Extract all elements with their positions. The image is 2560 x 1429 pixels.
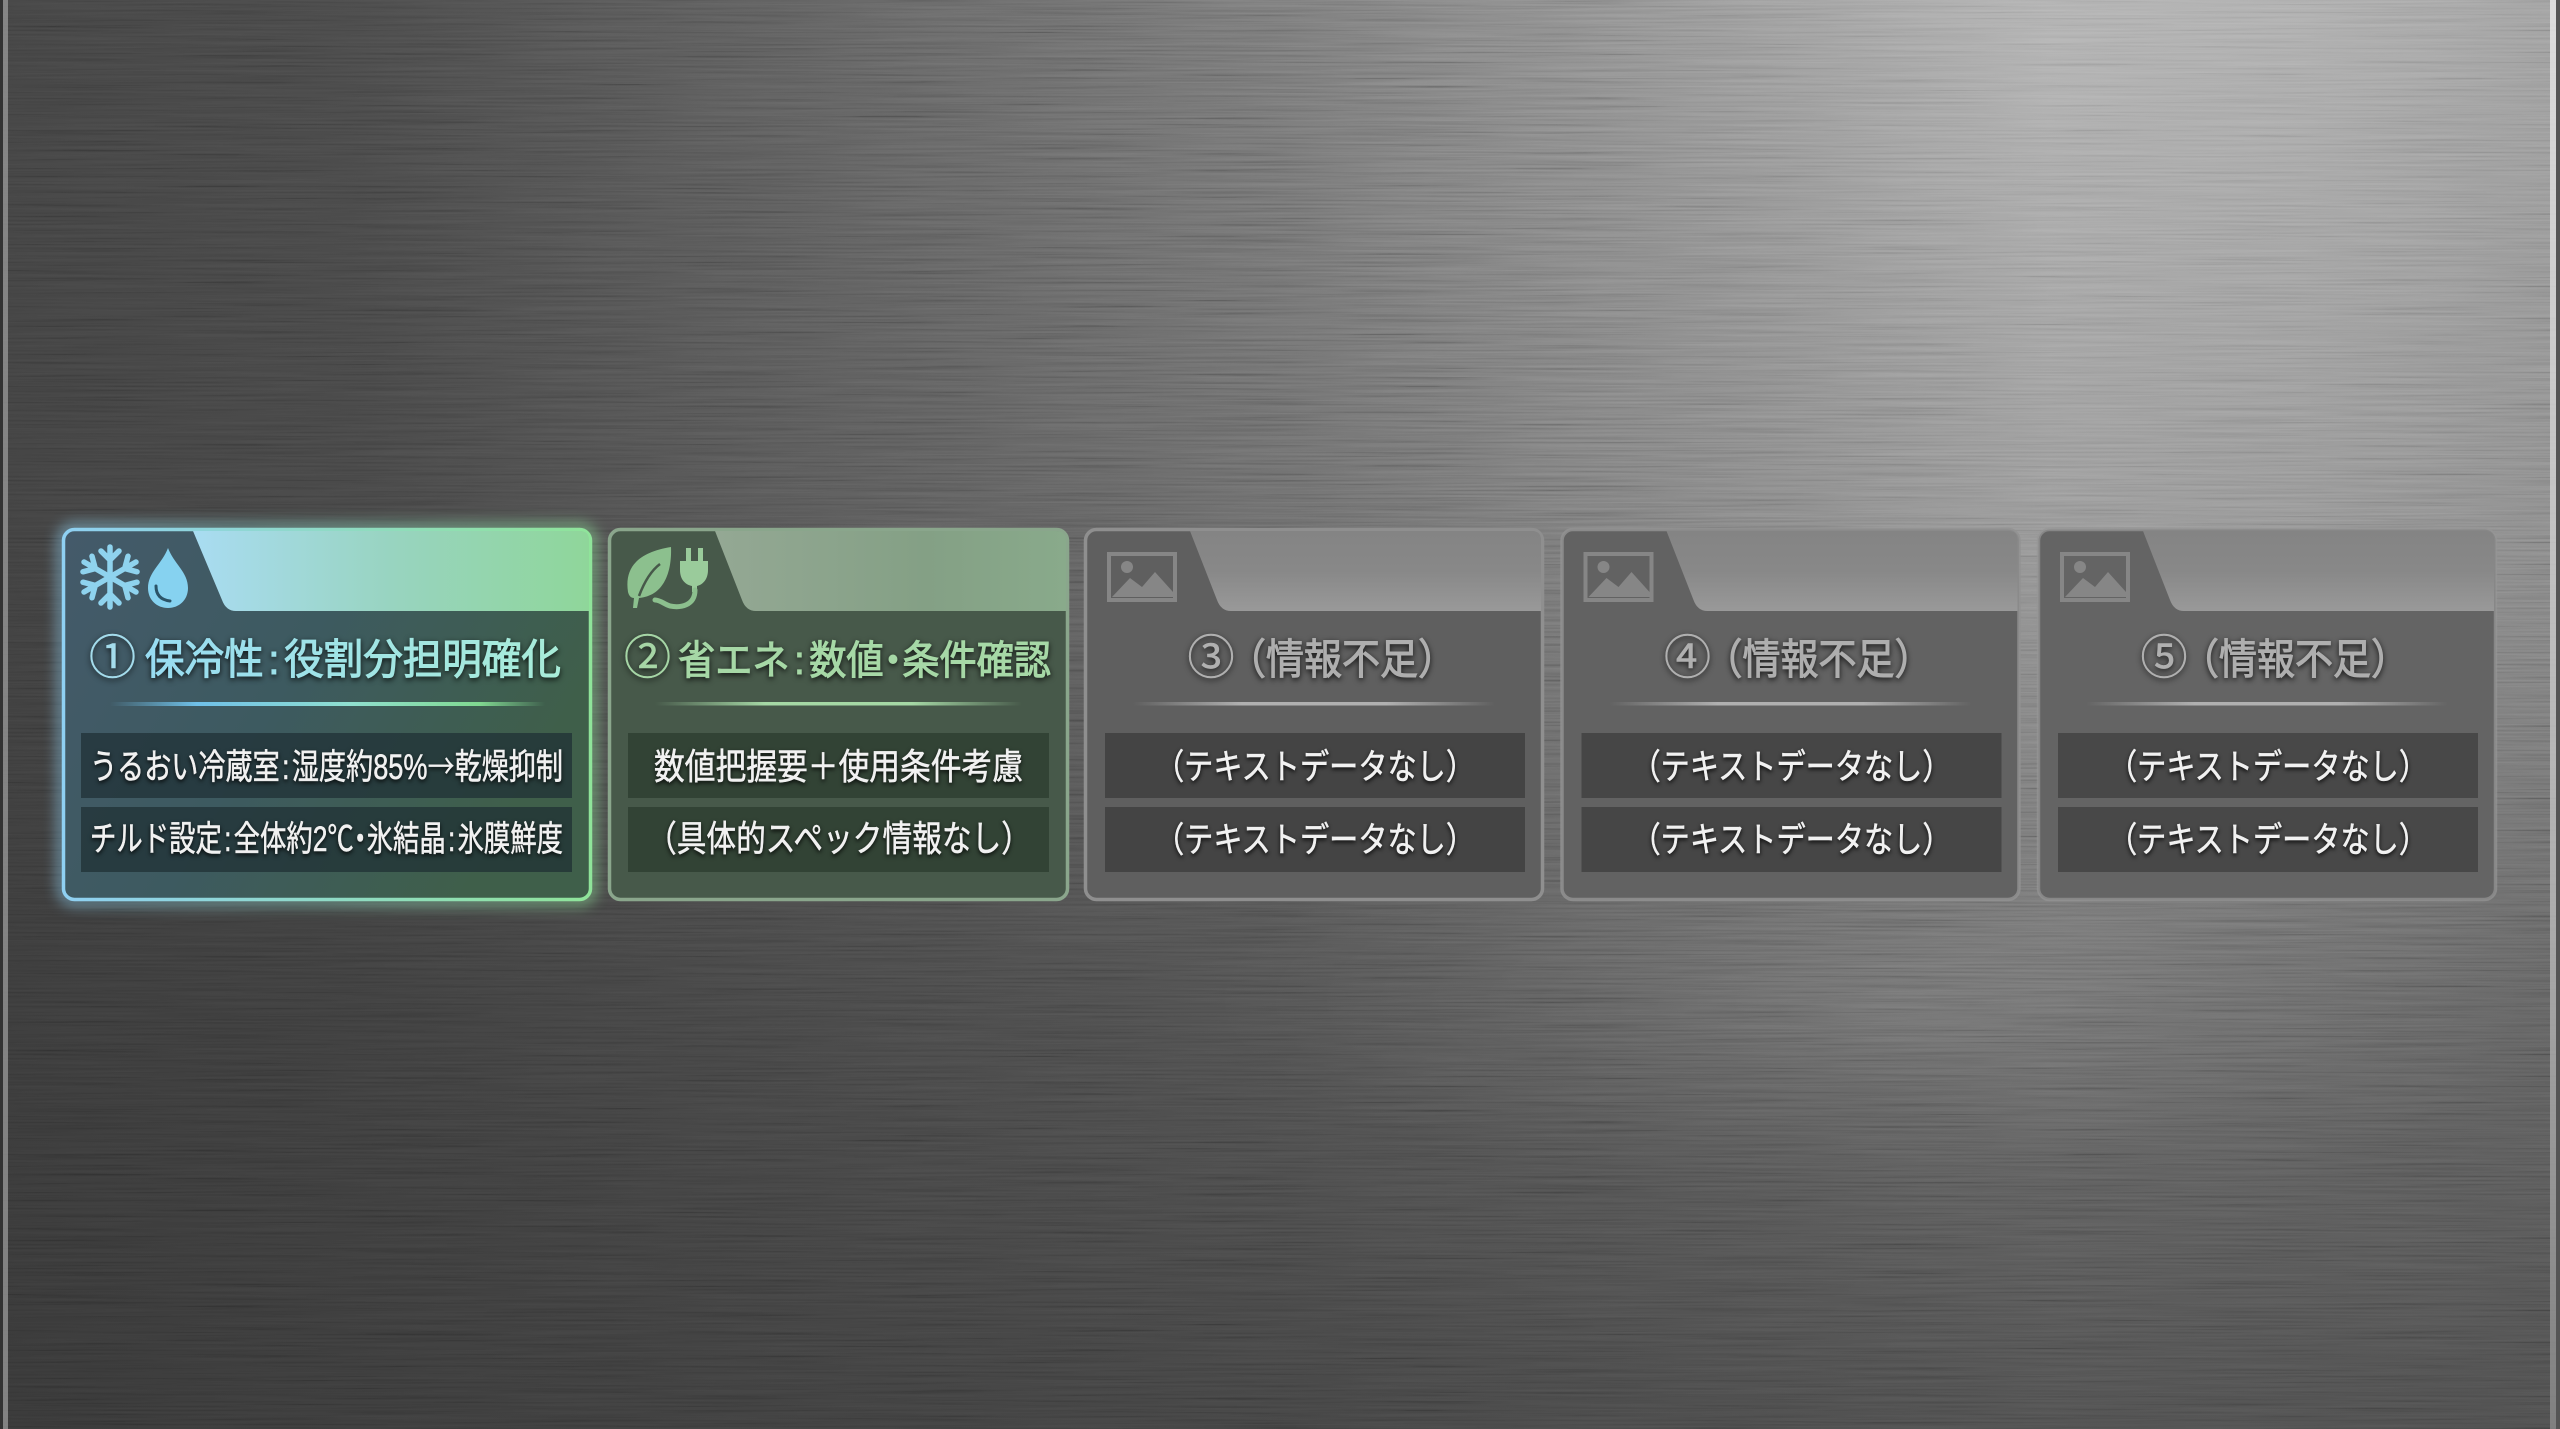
row 1: （テキストデータなし） [1155,748,1475,787]
heading [1664,631,1932,684]
icon: leaf and plug [627,547,708,608]
heading: 保冷性:役割分担明確化 [145,636,561,683]
header tab [1190,531,1541,611]
row 2 [628,807,1049,872]
panel: card 3 [1086,530,1542,900]
row 2 [2058,807,2478,872]
panel: card 1 保冷性 [62,528,592,901]
row 1 [1582,733,2002,798]
row 1 [2058,733,2478,798]
row 2 [81,807,572,872]
panel: card 2 省エネ [610,530,1068,900]
header tab [193,531,589,611]
row 2: （具体的スペック情報なし） [647,818,1031,859]
row 1: （テキストデータなし） [2108,748,2428,787]
heading: ③ [1188,631,1234,684]
row 2: チルド設定:全体約2℃・氷結晶:氷膜鮮度 [90,820,563,859]
icon: image placeholder [1109,554,1175,600]
heading: ② [624,631,671,684]
header tab [1666,531,2018,611]
panel: card 4 [1562,530,2019,900]
row 1: うるおい冷蔵室:湿度約85%→乾燥抑制 [90,739,563,790]
row 2: （テキストデータなし） [1155,821,1475,860]
heading [1188,631,1456,684]
heading [2140,631,2409,684]
panel: card 5 [2038,530,2496,900]
row 1 [628,733,1049,798]
heading: （情報不足） [1704,636,1932,683]
row 1: （テキストデータなし） [1632,748,1952,787]
icon: image placeholder [1586,554,1652,600]
header tab [715,531,1066,611]
icon: water drop [148,548,188,608]
row 2 [1582,807,2002,872]
row 2: （テキストデータなし） [2108,821,2428,860]
heading: ① [89,631,136,684]
icon: image placeholder [2062,554,2128,600]
heading: （情報不足） [1228,636,1456,683]
row 1: 数値把握要＋使用条件考慮 [654,746,1023,787]
row 1 [1105,733,1525,798]
heading: 省エネ:数値・条件確認 [678,639,1051,683]
heading: （情報不足） [2181,636,2409,683]
row 2 [1105,807,1525,872]
heading: ④ [1664,631,1711,684]
header tab [2143,531,2494,611]
icon: snowflake [80,547,140,607]
row 2: （テキストデータなし） [1632,821,1952,860]
heading: ⑤ [2140,631,2188,684]
